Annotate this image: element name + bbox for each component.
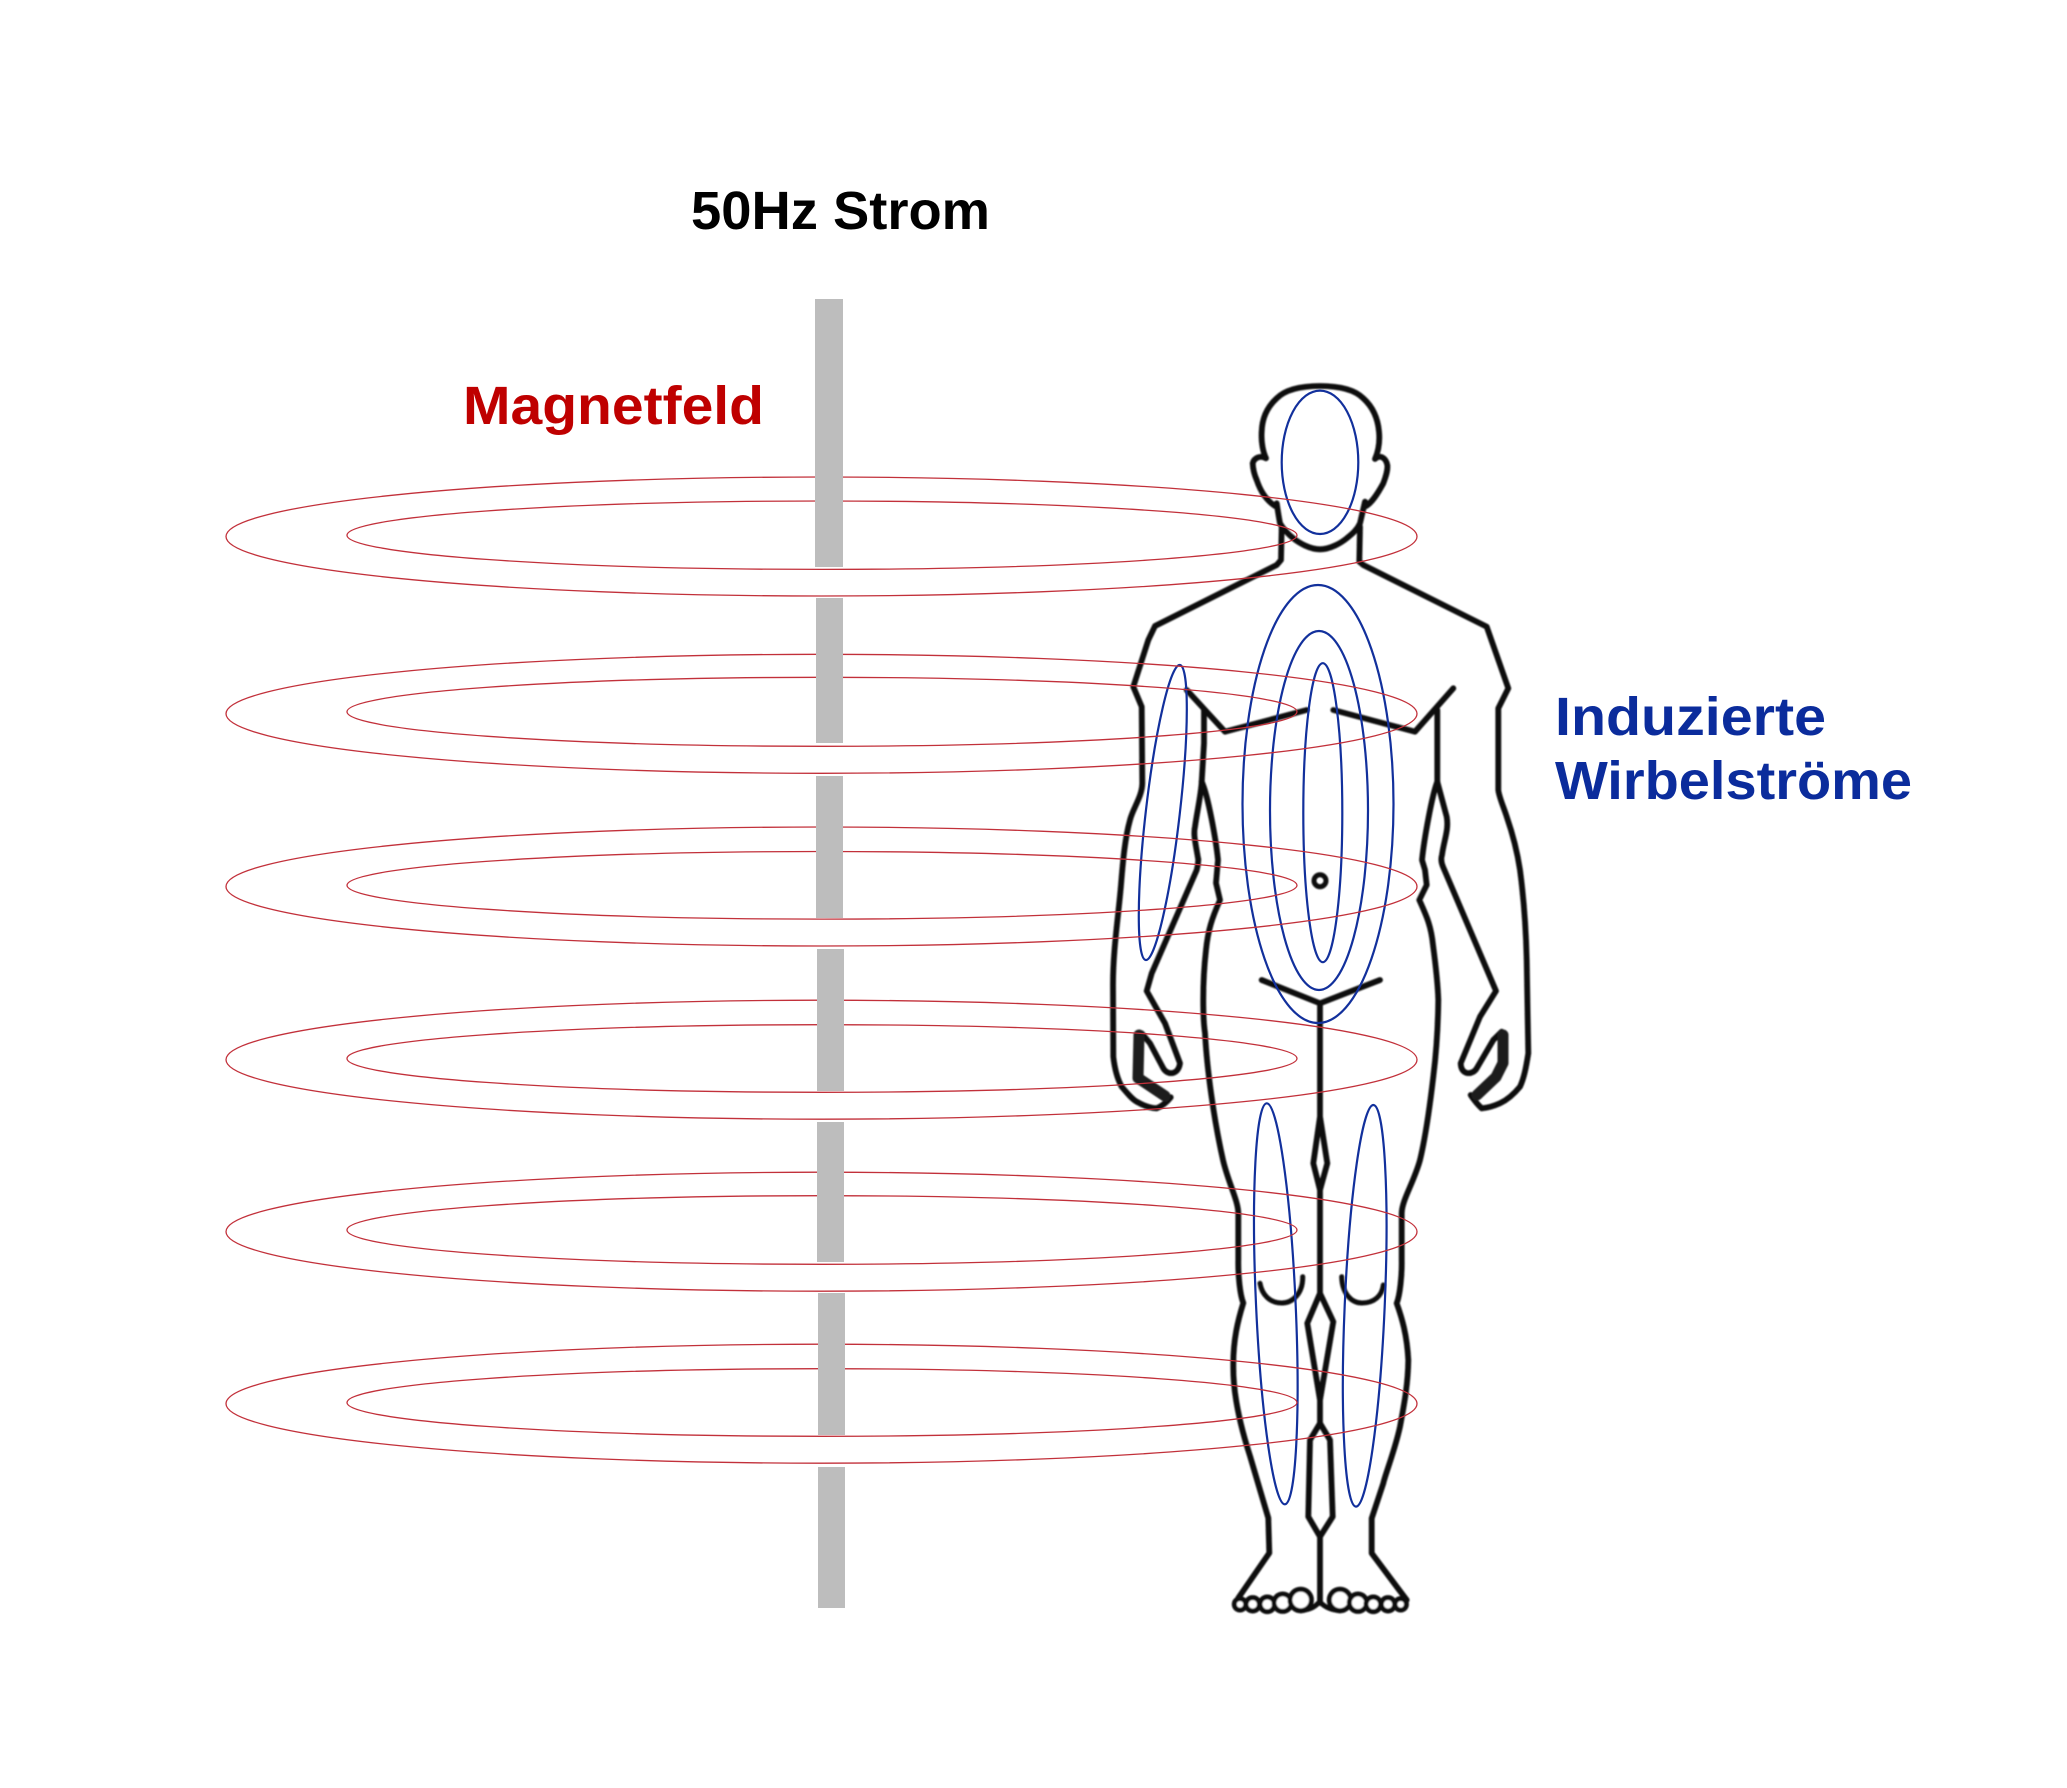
head and ears: [1253, 386, 1387, 549]
label: Induzierte Wirbelströme: Induzierte: [1555, 687, 1826, 747]
label: Magnetfeld: Magnetfeld: [463, 376, 764, 436]
magnetic field rings: [226, 477, 1417, 1463]
head loop: [1282, 391, 1358, 534]
knee arcs: [1260, 1277, 1383, 1303]
right outer side and hand: [1359, 527, 1528, 1108]
torso middle loop: [1270, 631, 1368, 990]
toes: [1234, 1589, 1406, 1612]
left leg loop: [1247, 1102, 1305, 1505]
label: Induzierte Wirbelströme: Wirbelströme: [1555, 751, 1912, 811]
heading: 50Hz Strom: 50Hz Strom: [691, 181, 990, 241]
human body outline: [1113, 386, 1528, 1612]
hand bands: [1138, 1035, 1503, 1096]
induced eddy current loops: [1129, 391, 1394, 1507]
arm loop: [1129, 663, 1197, 962]
current conductor (grey bar segments): [815, 299, 845, 1608]
torso inner loop: [1303, 663, 1342, 962]
right leg loop: [1336, 1104, 1393, 1507]
left outer side and hand: [1113, 527, 1282, 1108]
torso outer loop: [1242, 585, 1394, 1023]
chest lines: [1187, 688, 1453, 732]
groin and central leg line: [1262, 980, 1380, 1603]
label: Induzierte Wirbelströme: [1555, 687, 1912, 811]
navel: [1314, 875, 1326, 887]
right torso and leg: [1372, 782, 1438, 1600]
left torso and leg: [1202, 782, 1269, 1598]
